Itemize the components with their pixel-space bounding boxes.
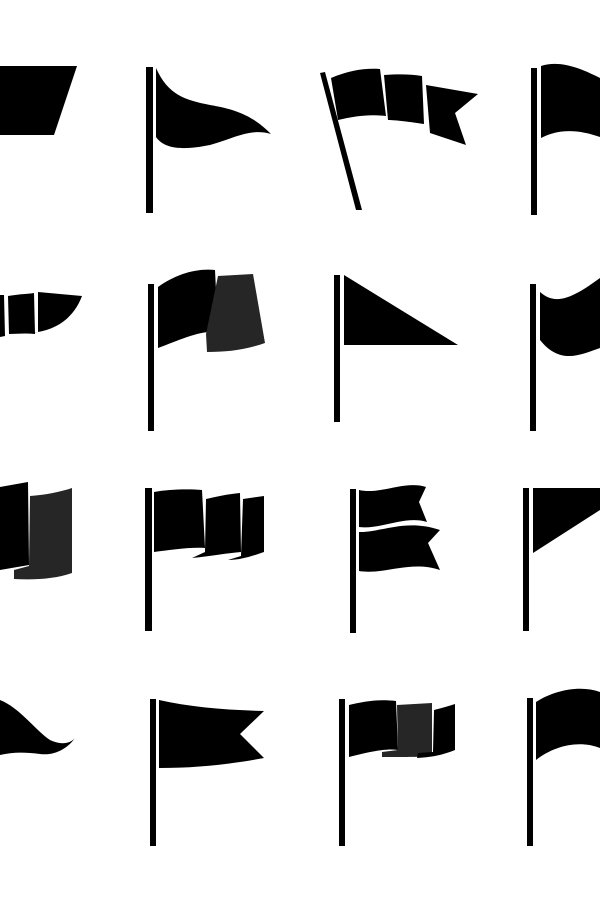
icon: flag r3c3 double pennant [350,485,440,633]
icon: flag r2c3 right triangle [334,275,458,422]
icon: flag r4c2 swallowtail [150,699,264,846]
icon: flag r3c1 folded partial [0,482,72,579]
icon: flag r3c4 triangle partial [523,488,600,631]
icon: flag r2c4 wave [530,278,600,431]
icon: flag r3c2 triple banner [145,488,264,631]
icon: flag r2c1 banner partial [0,292,82,337]
icon: flag r1c2 pennant wavy [146,67,271,213]
icon: flag r4c1 wavy partial [0,700,75,755]
icon: flag r4c3 folded banner [339,699,455,846]
icon: flag r1c1 cut trapezoid [0,66,77,135]
icon: flag r2c2 folded [148,270,265,431]
icon: flag r4c4 wave [527,689,600,846]
icon: flag r1c3 tilted banner [320,69,478,210]
icon: flag r1c4 wave [531,64,600,215]
